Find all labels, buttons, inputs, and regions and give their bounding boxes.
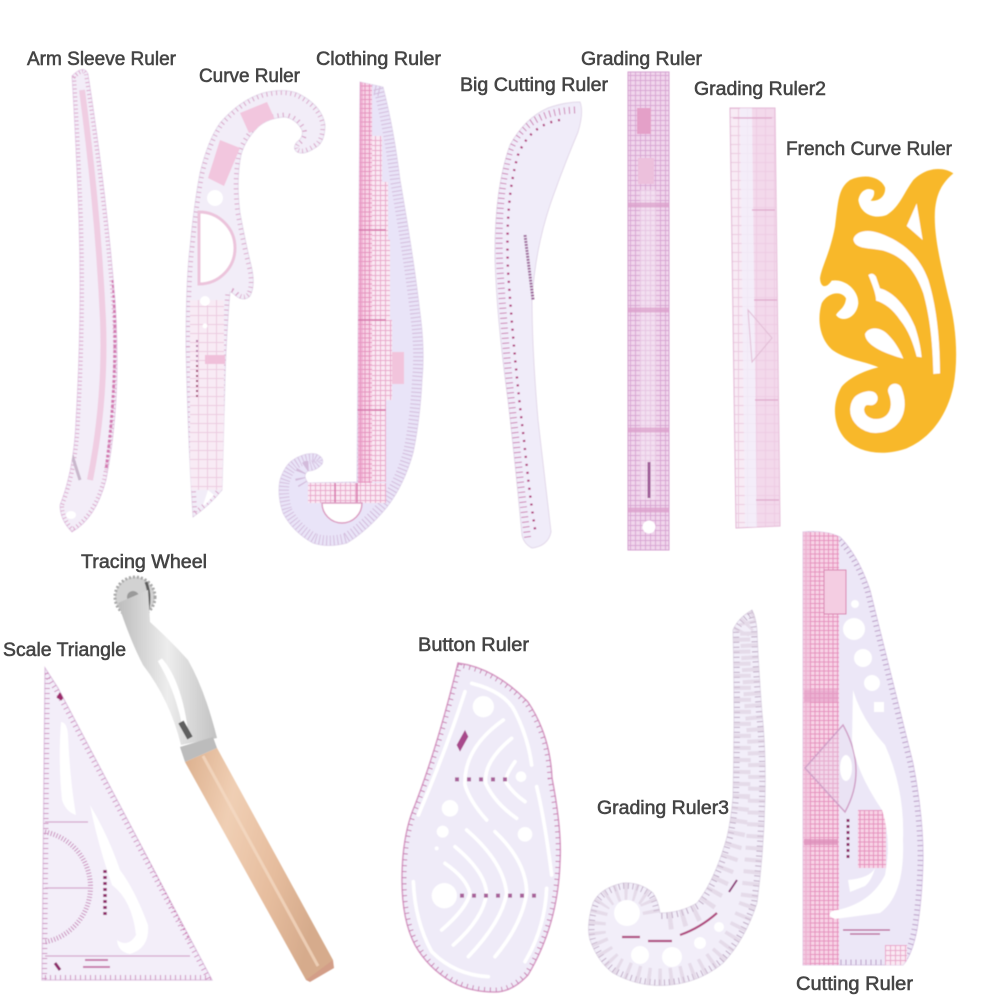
ruler print [525, 235, 533, 300]
label: Tracing Wheel: Tracing Wheel [81, 552, 207, 573]
shaft [118, 590, 217, 745]
holes [830, 600, 903, 919]
label: Arm Sleeve Ruler: Arm Sleeve Ruler [27, 49, 177, 70]
tool: tracing wheel [115, 577, 334, 982]
label: Cutting Ruler: Cutting Ruler [796, 974, 914, 995]
cutouts [853, 203, 940, 374]
label: Grading Ruler3: Grading Ruler3 [597, 798, 729, 819]
ruler: clothing [279, 82, 423, 546]
cutouts [60, 722, 76, 815]
label: Grading Ruler2: Grading Ruler2 [694, 79, 826, 100]
ruler: scale triangle [42, 668, 212, 980]
grid patches [240, 102, 276, 133]
wheel [115, 577, 155, 617]
label: Grading Ruler: Grading Ruler [581, 49, 703, 70]
label: Curve Ruler: Curve Ruler [199, 66, 301, 87]
mark [457, 730, 468, 752]
bottom spiral [857, 391, 898, 426]
protractor [805, 725, 856, 812]
label: Big Cutting Ruler: Big Cutting Ruler [460, 75, 609, 96]
ruler: french curve [819, 169, 956, 453]
handle [185, 748, 333, 980]
ruler: grading 3 [589, 610, 765, 986]
ruler: grading 2 [730, 108, 780, 528]
label: Button Ruler: Button Ruler [418, 635, 530, 656]
label: Clothing Ruler: Clothing Ruler [316, 49, 442, 70]
ruler: curve [186, 90, 325, 517]
collar [180, 737, 217, 762]
label: French Curve Ruler: French Curve Ruler [786, 139, 953, 160]
cutouts [199, 212, 235, 284]
ruler: arm sleeve [60, 69, 117, 532]
ruler: button [402, 663, 560, 992]
holes [432, 696, 532, 908]
ruler: big cutting [495, 102, 582, 548]
chevron cutouts [413, 683, 552, 977]
ruler: cutting [803, 532, 923, 967]
ruler: grading [628, 72, 669, 550]
holes [614, 900, 724, 967]
label: Scale Triangle: Scale Triangle [3, 640, 126, 661]
dot lines [455, 779, 538, 896]
protractor [45, 832, 90, 942]
